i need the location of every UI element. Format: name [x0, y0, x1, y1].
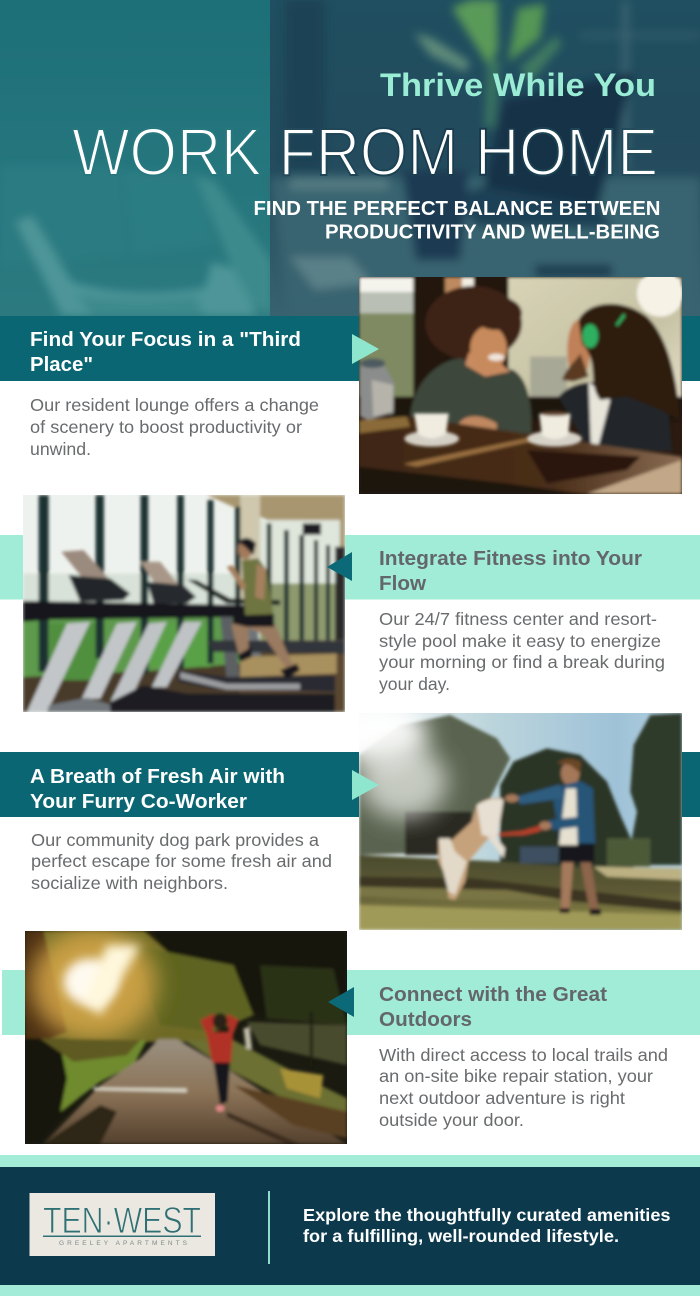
photo: man playing with a jumping dog	[359, 713, 682, 930]
woman walking	[200, 1013, 239, 1112]
treadmill legs	[27, 622, 90, 712]
photo: man running on a treadmill	[23, 495, 345, 712]
section 4: outdoors	[2, 927, 700, 1144]
band 3	[0, 752, 700, 817]
man	[498, 759, 601, 915]
logo: ten west greeley apartments: GREELEY APARTMENTS	[59, 1240, 188, 1247]
section 3: dog park	[0, 702, 700, 930]
body text 3: socialize with neighbors.	[31, 873, 228, 893]
body text 2	[379, 609, 665, 694]
band 4	[2, 970, 700, 1035]
tagline: PRODUCTIVITY AND WELL-BEING	[325, 222, 660, 244]
body text 3: perfect escape for some fresh air and	[31, 851, 332, 871]
body text 2: style pool make it easy to energize	[379, 631, 661, 651]
right arrow 1	[352, 334, 379, 364]
body text 3: Our community dog park provides a	[31, 830, 319, 850]
band 2	[0, 535, 700, 600]
body text 3	[31, 830, 332, 893]
cups and saucers	[404, 411, 582, 447]
hero right dark panel	[270, 0, 700, 316]
heading 2: Integrate Fitness into Your	[379, 548, 642, 570]
heading 2: Flow	[379, 573, 426, 595]
hero left teal panel	[0, 0, 272, 316]
body text 4: outside your door.	[379, 1110, 524, 1130]
heading 3: A Breath of Fresh Air with	[30, 766, 285, 788]
treadmill consoles	[61, 550, 113, 592]
band 1	[0, 316, 700, 381]
body text 1: of scenery to boost productivity or	[30, 417, 302, 437]
body text 1	[30, 395, 319, 459]
logo: ten west greeley apartments: TEN·WEST	[43, 1200, 201, 1241]
main title: work from home: WORK FROM HOME	[72, 116, 658, 190]
trees	[359, 713, 682, 868]
section 1: third place	[0, 270, 700, 494]
body text 4: With direct access to local trails and	[379, 1045, 668, 1065]
treadmill bar	[23, 601, 257, 622]
left arrow 2	[327, 552, 352, 581]
section 2: fitness	[0, 495, 700, 712]
table	[359, 417, 682, 494]
ground	[359, 855, 682, 930]
footer call to action: Explore the thoughtfully curated amenities	[303, 1205, 671, 1225]
heading 1	[30, 329, 301, 376]
body text 2: your day.	[379, 674, 450, 694]
woman 2	[559, 304, 680, 452]
right arrow 3	[352, 770, 379, 800]
body text 1: unwind.	[30, 439, 91, 459]
heading 2	[379, 548, 642, 595]
footer navy panel	[0, 1167, 700, 1285]
subtitle: thrive while you: Thrive While You	[380, 67, 656, 103]
body text 4	[379, 1045, 668, 1130]
photo: woman walking down a sunlit trail	[25, 931, 347, 1144]
body text 1: Our resident lounge offers a change	[30, 395, 319, 415]
backpack	[360, 367, 394, 420]
tagline	[254, 198, 660, 244]
body text 2: Our 24/7 fitness center and resort-	[379, 609, 657, 629]
footer	[0, 1155, 700, 1296]
dog	[438, 798, 505, 900]
heading 3	[30, 766, 285, 813]
footer mint strips	[0, 1155, 700, 1296]
hero header panel	[0, 0, 700, 316]
heading 3: Your Furry Co-Worker	[30, 791, 247, 813]
logo: ten west greeley apartments	[30, 1193, 215, 1256]
runner	[227, 538, 300, 679]
heading 4	[379, 984, 607, 1031]
vertical divider	[268, 1191, 270, 1264]
heading 4: Outdoors	[379, 1009, 472, 1031]
footer call to action: for a fulfilling, well-rounded lifestyle.	[303, 1226, 619, 1246]
heading 1: Find Your Focus in a "Third	[30, 329, 301, 351]
left arrow 4	[328, 987, 354, 1017]
treadmill decks	[49, 698, 124, 712]
woman 1	[410, 286, 532, 435]
body text 2: your morning or find a break during	[379, 652, 665, 672]
photo: two women at a cafe table	[359, 277, 682, 494]
heading 1: Place"	[30, 354, 93, 376]
tagline: FIND THE PERFECT BALANCE BETWEEN	[254, 198, 660, 220]
footer call to action	[303, 1205, 671, 1246]
body text 4: an on-site bike repair station, your	[379, 1066, 653, 1086]
heading 4: Connect with the Great	[379, 984, 607, 1006]
body text 4: next outdoor adventure is right	[379, 1088, 625, 1108]
road	[44, 1039, 347, 1144]
